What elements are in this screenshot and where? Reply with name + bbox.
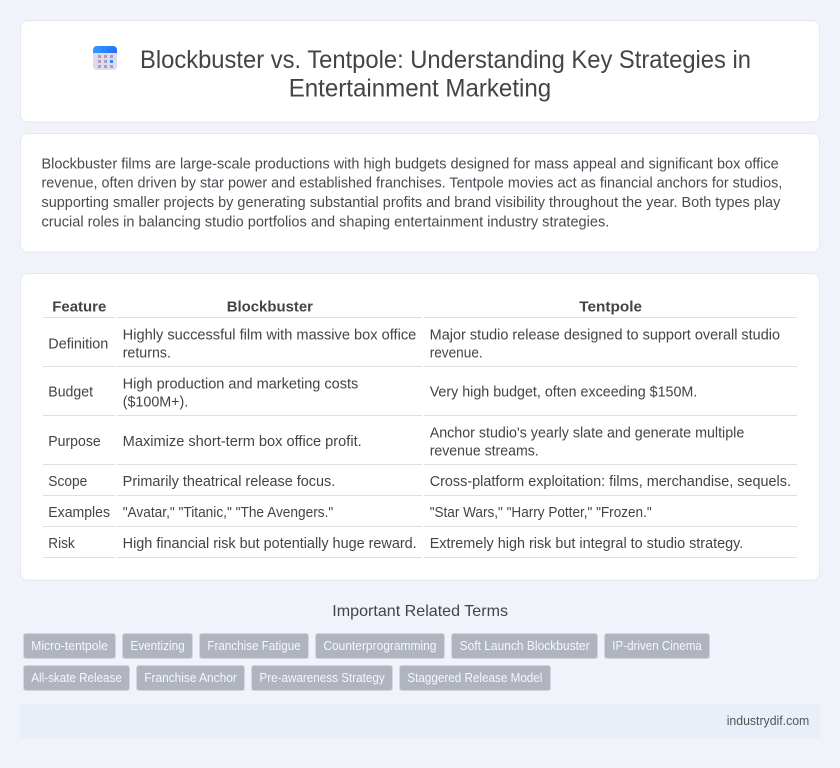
tag: Micro-tentpole xyxy=(31,639,108,653)
table row: purpose: revenue streams. xyxy=(430,443,539,459)
table row: scope: Primarily theatrical release focus. xyxy=(123,474,335,490)
table row: examples: "Star Wars," "Harry Potter," "Frozen." xyxy=(430,505,652,521)
text block: introduction paragraph: revenue, often driven by star power and established franchises. Tentpole movies act as financial anchors for studios, xyxy=(42,176,782,192)
table row: risk: High financial risk but potentially huge reward. xyxy=(123,536,417,552)
title: Blockbuster vs. Tentpole: Understanding Key Strategies in xyxy=(140,46,751,74)
table row: risk: Extremely high risk but integral to studio strategy. xyxy=(430,536,743,552)
table row: definition: revenue. xyxy=(430,345,483,361)
tag xyxy=(200,634,308,658)
panel: header xyxy=(20,20,820,122)
table row: budget: Budget xyxy=(48,385,93,401)
table row: examples: Examples xyxy=(48,505,110,521)
table row: purpose: Maximize short-term box office profit. xyxy=(123,434,362,450)
tag: Pre-awareness Strategy xyxy=(259,671,385,685)
tag xyxy=(604,634,710,658)
table row: definition: returns. xyxy=(123,345,171,361)
panel: comparison table xyxy=(20,274,820,580)
table row: definition: Highly successful film with massive box office xyxy=(123,327,416,343)
table header row xyxy=(52,299,642,316)
text block: introduction paragraph: Blockbuster films are large-scale productions with high budgets designed for mass appeal and significant box office xyxy=(42,156,779,172)
footer xyxy=(20,704,820,738)
tag xyxy=(400,666,550,690)
tag xyxy=(24,634,116,658)
panel: introduction xyxy=(20,134,820,252)
tag: Franchise Fatigue xyxy=(207,639,301,653)
text block: introduction paragraph: supporting smaller projects by generating substantial profits and brand visibility throughout the year. Both types play xyxy=(42,195,781,211)
tag: Counterprogramming xyxy=(323,639,436,653)
table row: scope: Cross-platform exploitation: films, merchandise, sequels. xyxy=(430,474,791,490)
tag xyxy=(122,634,192,658)
title: Entertainment Marketing xyxy=(289,74,551,102)
tag xyxy=(316,634,444,658)
tag list: related terms xyxy=(24,634,710,690)
tag: Staggered Release Model xyxy=(407,671,542,685)
table header row: Feature xyxy=(52,299,106,316)
table row: scope xyxy=(48,474,791,490)
table row: purpose: Purpose xyxy=(48,434,101,450)
tag: Franchise Anchor xyxy=(144,671,237,685)
table row: risk xyxy=(48,536,743,552)
tag: Eventizing xyxy=(130,639,185,653)
table row: budget: ($100M+). xyxy=(123,394,188,410)
tag xyxy=(136,666,244,690)
tag xyxy=(452,634,598,658)
table row: definition: Major studio release designed to support overall studio xyxy=(430,327,780,343)
table row: definition xyxy=(48,327,780,361)
tag xyxy=(24,666,130,690)
table row: budget: High production and marketing costs xyxy=(123,376,358,392)
text block: introduction paragraph: crucial roles in balancing studio portfolios and shaping entertainment industry strategies. xyxy=(42,215,609,231)
table row: examples xyxy=(48,505,652,521)
table row: purpose: Anchor studio's yearly slate and generate multiple xyxy=(430,425,744,441)
tag xyxy=(252,666,392,690)
table row: scope: Scope xyxy=(48,474,87,490)
table header row: Tentpole xyxy=(579,299,642,316)
table row: budget: Very high budget, often exceeding $150M. xyxy=(430,385,697,401)
tag: All-skate Release xyxy=(31,671,122,685)
tag: Soft Launch Blockbuster xyxy=(460,639,590,653)
table row: risk: Risk xyxy=(48,536,75,552)
icon: calendar xyxy=(93,46,117,70)
text block: introduction paragraph xyxy=(42,156,782,231)
heading: related terms: Important Related Terms xyxy=(332,603,508,620)
table row: budget xyxy=(48,376,697,410)
table header row: Blockbuster xyxy=(227,299,313,316)
tag: IP-driven Cinema xyxy=(612,639,702,653)
table row: definition: Definition xyxy=(48,336,108,352)
footer: industrydif.com xyxy=(727,713,809,728)
table row: purpose xyxy=(48,425,744,459)
table row: examples: "Avatar," "Titanic," "The Avengers." xyxy=(123,505,333,521)
title xyxy=(140,46,751,102)
